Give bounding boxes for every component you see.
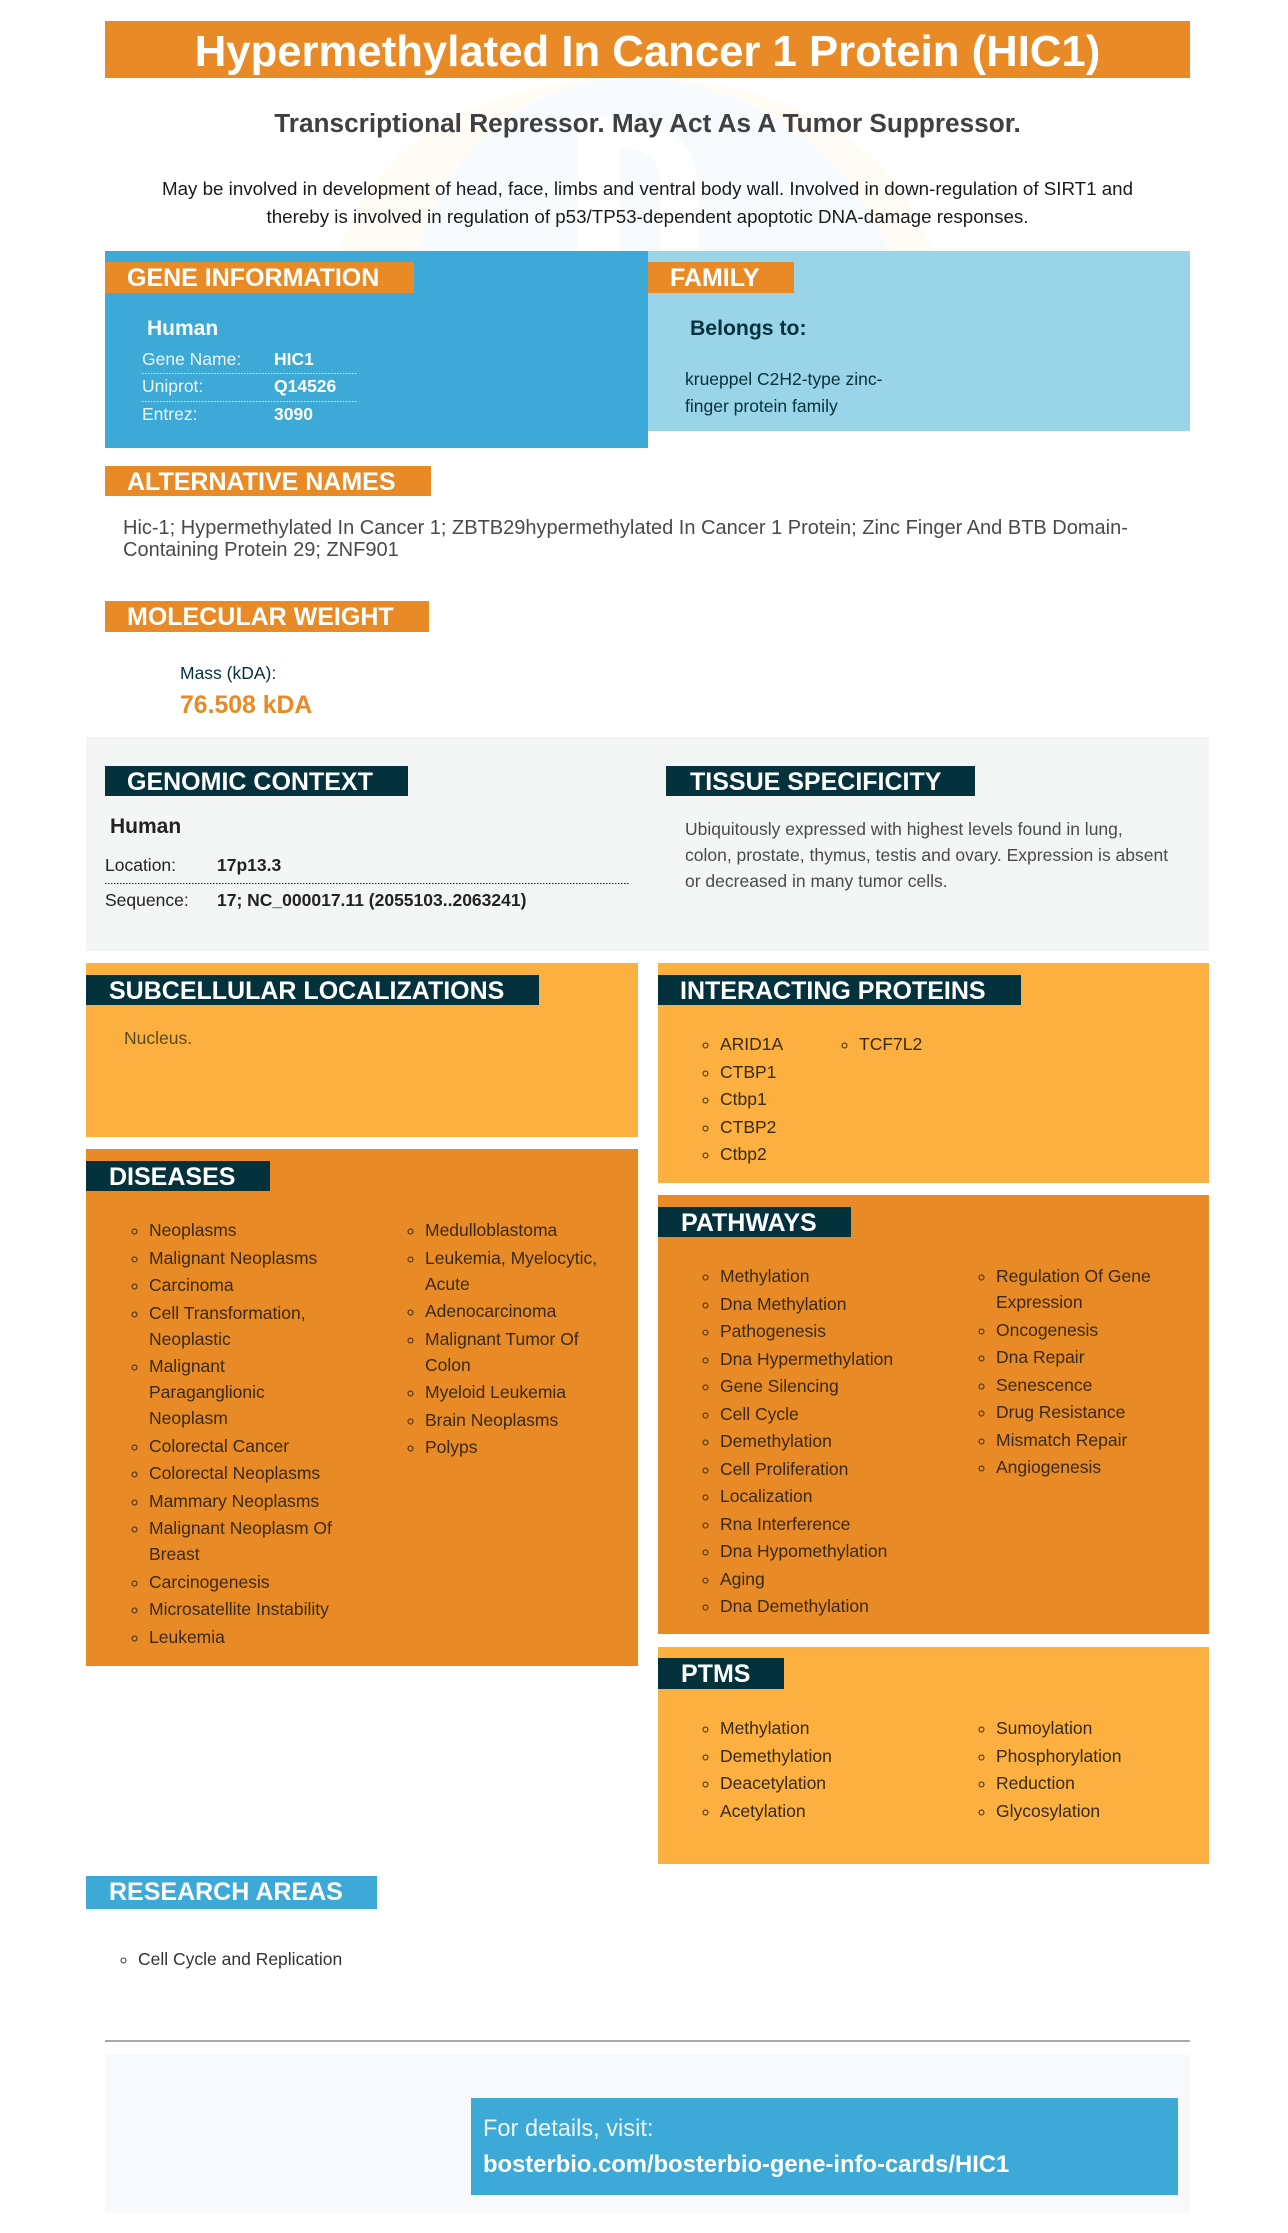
heading: family xyxy=(648,262,794,293)
alternative names text: Hic-1; Hypermethylated In Cancer 1; ZBTB29hypermethylated In Cancer 1 Protein; Zinc Finger And BTB Domain- xyxy=(123,517,1128,539)
list: pathways column 1: Localization xyxy=(720,1486,812,1506)
list: pathways column 2: Expression xyxy=(996,1292,1083,1312)
list: diseases column 1: Leukemia xyxy=(149,1626,225,1646)
heading: research areas xyxy=(86,1876,377,1909)
list: diseases column 1: Microsatellite Instability xyxy=(149,1599,329,1619)
list: PTMs column 1: Demethylation xyxy=(720,1746,832,1766)
panel: gene information xyxy=(105,251,648,448)
list: diseases column 1: Carcinoma xyxy=(149,1275,234,1295)
list: pathways column 1: Rna Interference xyxy=(720,1514,850,1534)
description text xyxy=(162,178,1133,227)
list: pathways column 1: Dna Demethylation xyxy=(720,1596,869,1616)
list: diseases column 1: Mammary Neoplasms xyxy=(149,1490,319,1510)
list: research areas: Cell Cycle and Replication xyxy=(138,1949,342,1969)
list: pathways column 1: Aging xyxy=(720,1568,765,1588)
list: diseases column 2 xyxy=(408,1220,597,1457)
list: pathways column 1: Gene Silencing xyxy=(720,1376,839,1396)
list: diseases column 1: Neoplasm xyxy=(149,1408,228,1428)
panel: PTMs xyxy=(658,1647,1209,1864)
list: pathways column 2: Drug Resistance xyxy=(996,1402,1125,1422)
list: pathways column 1: Pathogenesis xyxy=(720,1321,826,1341)
list: diseases column 1 xyxy=(132,1220,332,1646)
heading: gene information: GENE INFORMATION xyxy=(127,264,379,292)
heading: molecular weight: MOLECULAR WEIGHT xyxy=(127,603,394,631)
list: pathways column 1: Dna Hypomethylation xyxy=(720,1541,887,1561)
list: diseases column 2: Brain Neoplasms xyxy=(425,1410,558,1430)
list: diseases column 1: Carcinogenesis xyxy=(149,1572,270,1592)
list: diseases column 2: Adenocarcinoma xyxy=(425,1301,556,1321)
list: PTMs column 1: Acetylation xyxy=(720,1800,806,1820)
gene details table: Entrez: xyxy=(142,404,197,424)
tissue specificity text: Ubiquitously expressed with highest levels found in lung, xyxy=(685,819,1123,839)
list: pathways column 2: Mismatch Repair xyxy=(996,1430,1127,1450)
family description xyxy=(685,369,882,416)
gene details table: Gene Name: xyxy=(142,349,241,369)
gene details table: Q14526 xyxy=(274,376,336,396)
list: PTMs column 2: Phosphorylation xyxy=(996,1746,1122,1766)
heading: family: FAMILY xyxy=(670,264,759,292)
heading: diseases: DISEASES xyxy=(109,1163,235,1191)
list: PTMs column 1 xyxy=(702,1718,832,1820)
list: diseases column 2: Colon xyxy=(425,1354,471,1374)
heading: subcellular localizations: SUBCELLULAR LOCALIZATIONS xyxy=(109,977,504,1005)
heading: PTMs xyxy=(658,1658,784,1689)
heading: tissue specificity: TISSUE SPECIFICITY xyxy=(690,768,941,796)
list: diseases column 2: Polyps xyxy=(425,1437,478,1457)
tissue specificity text: or decreased in many tumor cells. xyxy=(685,871,948,891)
list: diseases column 1: Breast xyxy=(149,1544,200,1564)
heading: interacting proteins: INTERACTING PROTEINS xyxy=(680,977,986,1005)
organism label: Human xyxy=(110,815,181,838)
localization text: Nucleus. xyxy=(124,1028,192,1048)
list: pathways column 2: Angiogenesis xyxy=(996,1457,1101,1477)
visit label: For details, visit: xyxy=(483,2116,653,2142)
sequence row: 17; NC_000017.11 (2055103..2063241) xyxy=(217,890,526,910)
list: pathways column 1: Dna Methylation xyxy=(720,1294,846,1314)
list: diseases column 2: Medulloblastoma xyxy=(425,1220,557,1240)
list: interacting proteins column 1: CTBP2 xyxy=(720,1116,776,1136)
list: diseases column 1: Malignant Neoplasm Of xyxy=(149,1518,332,1538)
list: pathways column 2: Oncogenesis xyxy=(996,1320,1098,1340)
list: pathways column 1: Demethylation xyxy=(720,1431,832,1451)
tissue specificity text: colon, prostate, thymus, testis and ovary. Expression is absent xyxy=(685,845,1168,865)
list: pathways column 2: Dna Repair xyxy=(996,1347,1085,1367)
list: diseases column 1: Malignant xyxy=(149,1356,225,1376)
list: interacting proteins column 1: CTBP1 xyxy=(720,1062,776,1082)
list: diseases column 1: Neoplastic xyxy=(149,1328,231,1348)
panel: subcellular localizations xyxy=(86,963,638,1137)
location row: 17p13.3 xyxy=(217,855,281,875)
description text: May be involved in development of head, face, limbs and ventral body wall. Involved in down-regulation of SIRT1 and xyxy=(162,178,1133,199)
gene details table: 3090 xyxy=(274,404,313,424)
mass label: Mass (kDA): xyxy=(180,663,276,683)
list: pathways column 1 xyxy=(702,1266,893,1616)
family description: finger protein family xyxy=(685,396,838,416)
location row xyxy=(105,855,281,875)
heading: pathways: PATHWAYS xyxy=(681,1209,817,1237)
list: PTMs column 1: Deacetylation xyxy=(720,1773,826,1793)
list: interacting proteins column 1 xyxy=(702,1034,784,1164)
list: pathways column 1: Cell Cycle xyxy=(720,1404,799,1424)
list: pathways column 1: Methylation xyxy=(720,1266,810,1286)
family description: krueppel C2H2-type zinc- xyxy=(685,369,882,389)
alternative names text xyxy=(123,517,1128,561)
callout: details link xyxy=(471,2098,1178,2195)
panel: interacting proteins xyxy=(658,963,1209,1183)
list: pathways column 2: Senescence xyxy=(996,1374,1092,1394)
list: diseases column 1: Malignant Neoplasms xyxy=(149,1248,317,1268)
organism label: Human xyxy=(147,317,218,340)
list: diseases column 2: Acute xyxy=(425,1274,470,1294)
panel: genomic context and tissue specificity xyxy=(86,737,1209,951)
list: PTMs column 1: Methylation xyxy=(720,1718,810,1738)
list: diseases column 1: Cell Transformation, xyxy=(149,1302,306,1322)
list: diseases column 1: Colorectal Cancer xyxy=(149,1436,289,1456)
location row: Location: xyxy=(105,855,176,875)
list: interacting proteins column 2: TCF7L2 xyxy=(859,1034,922,1054)
list: pathways column 1: Dna Hypermethylation xyxy=(720,1348,893,1368)
url: bosterbio.com/bosterbio-gene-info-cards/HIC1 xyxy=(483,2151,1009,2178)
heading: diseases xyxy=(86,1161,270,1191)
heading: alternative names: ALTERNATIVE NAMES xyxy=(127,468,396,496)
background watermark logo xyxy=(340,78,932,251)
list: interacting proteins column 1: Ctbp2 xyxy=(720,1144,767,1164)
list: diseases column 2: Malignant Tumor Of xyxy=(425,1328,579,1348)
list: pathways column 2 xyxy=(978,1266,1151,1477)
description text: thereby is involved in regulation of p53/TP53-dependent apoptotic DNA-damage responses. xyxy=(267,206,1028,227)
panel: pathways xyxy=(658,1195,1209,1634)
title: Hypermethylated In Cancer 1 Protein (HIC1) xyxy=(195,27,1100,76)
mass value: 76.508 kDA xyxy=(180,692,312,719)
panel: family xyxy=(648,251,1190,431)
list: diseases column 2: Myeloid Leukemia xyxy=(425,1382,566,1402)
list: diseases column 1: Colorectal Neoplasms xyxy=(149,1463,320,1483)
list: PTMs column 2: Reduction xyxy=(996,1773,1075,1793)
list: PTMs column 2: Glycosylation xyxy=(996,1800,1100,1820)
list: pathways column 1: Cell Proliferation xyxy=(720,1458,848,1478)
list: interacting proteins column 1: ARID1A xyxy=(720,1034,783,1054)
list: PTMs column 2: Sumoylation xyxy=(996,1718,1092,1738)
alternative names text: Containing Protein 29; ZNF901 xyxy=(123,539,399,561)
list: pathways column 2: Regulation Of Gene xyxy=(996,1266,1151,1286)
gene details table: Uniprot: xyxy=(142,376,203,396)
heading: research areas: RESEARCH AREAS xyxy=(109,1878,343,1906)
list: diseases column 2: Leukemia, Myelocytic, xyxy=(425,1248,597,1268)
heading: pathways xyxy=(658,1207,851,1237)
tissue specificity text xyxy=(685,819,1168,891)
panel: diseases xyxy=(86,1149,638,1666)
gene details table xyxy=(142,349,356,424)
sequence row: Sequence: xyxy=(105,890,189,910)
list: diseases column 1: Neoplasms xyxy=(149,1220,237,1240)
heading: PTMs: PTMS xyxy=(681,1660,750,1688)
panel: footer xyxy=(105,2055,1190,2213)
subtitle: Transcriptional Repressor. May Act As A Tumor Suppressor. xyxy=(274,108,1021,138)
gene details table: HIC1 xyxy=(274,349,314,369)
list: PTMs column 2 xyxy=(978,1718,1122,1820)
list: diseases column 1: Paraganglionic xyxy=(149,1382,265,1402)
sequence row xyxy=(105,883,628,910)
belongs to label: Belongs to: xyxy=(690,317,807,340)
list: interacting proteins column 1: Ctbp1 xyxy=(720,1089,767,1109)
heading: genomic context: GENOMIC CONTEXT xyxy=(127,768,373,796)
